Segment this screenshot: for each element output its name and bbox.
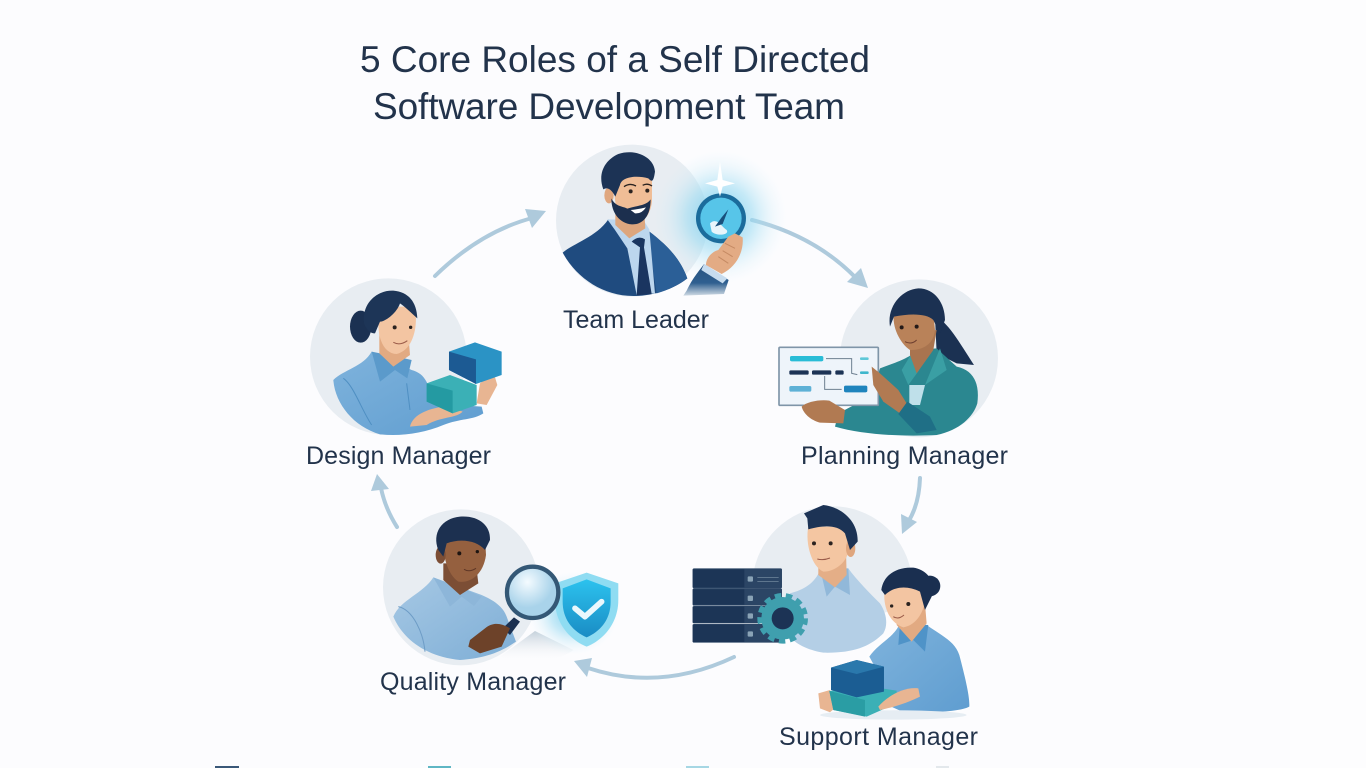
arrow: design to team leader: [435, 209, 546, 276]
figure: design manager with cubes: [310, 278, 502, 435]
arrow: quality to design: [371, 474, 397, 527]
figure: support engineer with server and gear: [693, 505, 972, 720]
label: team leader: Team Leader: [563, 306, 709, 334]
figure: team leader with compass: [556, 145, 787, 297]
panel: quality manager: [380, 509, 618, 696]
title: Software Development Team: [373, 86, 845, 127]
label: support manager: Support Manager: [779, 723, 978, 751]
panel: design manager: [306, 278, 502, 470]
figure: planning manager with board: [779, 279, 998, 437]
title: [360, 39, 870, 127]
panel: planning manager: [779, 279, 1008, 470]
label: planning manager: Planning Manager: [801, 442, 1008, 470]
panel: support manager: [693, 505, 978, 751]
panel: team leader: [556, 145, 787, 334]
arrow: team leader to planning: [752, 220, 868, 288]
label: quality manager: Quality Manager: [380, 668, 566, 696]
arrow: support to quality: [574, 657, 734, 678]
label: design manager: Design Manager: [306, 442, 491, 470]
arrow: planning to support: [901, 478, 920, 534]
figure: quality manager with magnifier and shield: [383, 509, 618, 665]
title: 5 Core Roles of a Self Directed: [360, 39, 870, 80]
legend swatches cut off at bottom edge: [215, 766, 949, 768]
